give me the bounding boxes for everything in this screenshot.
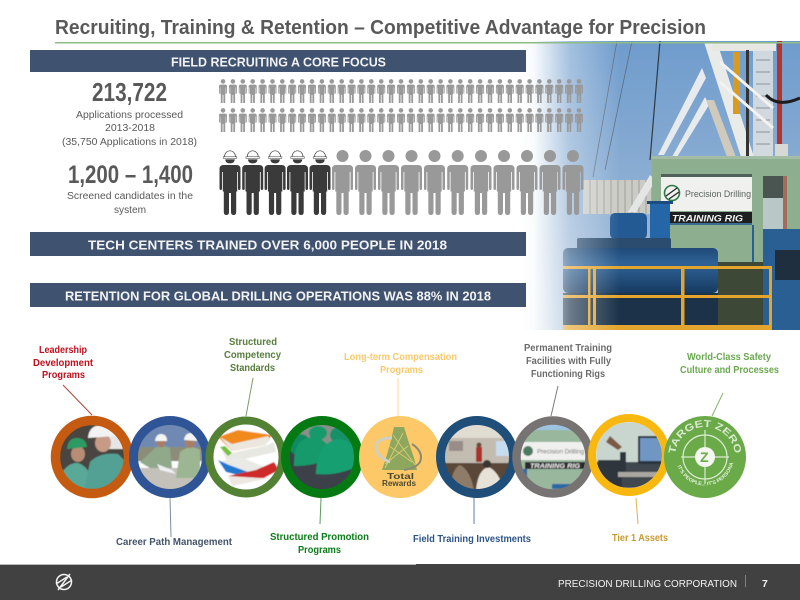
footer bar: 7 <box>762 578 768 590</box>
label: leadership development <box>33 345 94 381</box>
rig photo <box>520 41 800 330</box>
banner: retention <box>30 283 526 307</box>
label: structured competency: Standards <box>230 363 275 374</box>
leader line: safety <box>712 393 723 416</box>
label: structured competency: Competency <box>224 350 281 361</box>
circle: field training photo <box>440 420 514 494</box>
label: permanent training facilities: Permanent Training <box>524 343 612 354</box>
label: leadership development: Leadership <box>39 345 87 356</box>
banner: tech centers <box>30 232 526 256</box>
label: career path management: Career Path Management <box>116 537 233 548</box>
title: Recruiting, Training & Retention – Competitive Advantage for Precision <box>55 17 706 39</box>
leader line: competency <box>246 378 253 416</box>
banner: retention: RETENTION FOR GLOBAL DRILLING OPERATIONS WAS 88% IN 2018 <box>65 288 491 304</box>
footer bar: PRECISION DRILLING CORPORATION <box>558 578 737 590</box>
label: structured competency: Structured <box>229 337 277 348</box>
leader line: facilities <box>551 386 558 416</box>
label: long-term compensation: Programs <box>380 365 423 376</box>
label: leadership development: Development <box>33 358 94 369</box>
label: long-term compensation <box>344 352 457 376</box>
rig photo: TRAINING RIG <box>672 214 743 224</box>
label: structured promotion: Programs <box>298 545 341 556</box>
rig photo: Precision Drilling <box>685 189 751 200</box>
circle: target zero badge: TARGET ZERO <box>668 420 741 453</box>
circle: total rewards logo: Rewards <box>382 479 417 488</box>
stat: applications processed: (35,750 Applications in 2018) <box>62 137 197 148</box>
pictogram: small people rows <box>219 79 583 132</box>
stat: applications processed: 213,722 <box>92 77 167 107</box>
label: long-term compensation: Long-term Compensation <box>344 352 457 363</box>
stat: screened candidates: system <box>114 205 146 216</box>
leader line: promotion <box>320 498 321 524</box>
label: permanent training facilities <box>524 343 612 380</box>
circle: leadership photo <box>56 420 128 494</box>
label: structured promotion: Structured Promotion <box>270 532 369 543</box>
label: world-class safety <box>680 352 779 376</box>
circle: hard hats photo <box>286 420 361 494</box>
stat: applications processed: Applications processed <box>76 110 183 121</box>
leader line: field training <box>473 498 475 524</box>
circle: target zero badge: Z <box>700 449 709 465</box>
circle: tier 1 control cabin photo <box>592 418 666 492</box>
leader line: leadership <box>63 385 92 415</box>
circle: total rewards logo: Total <box>387 472 414 481</box>
circle: books photo <box>210 420 282 494</box>
label: permanent training facilities: Functioning Rigs <box>531 369 605 380</box>
label: permanent training facilities: Facilities with Fully <box>526 356 611 367</box>
stat: screened candidates: Screened candidates in the <box>67 191 193 202</box>
label: structured promotion <box>270 532 369 556</box>
pictogram: large people with hard hats <box>220 150 584 215</box>
label: structured competency <box>224 337 281 374</box>
banner: field recruiting <box>30 50 526 72</box>
leader line: compensation <box>397 378 399 416</box>
circle: training rig photo <box>516 420 590 494</box>
circle: training rig photo: TRAINING RIG <box>530 464 580 470</box>
stat: screened candidates: 1,200 – 1,400 <box>68 161 193 189</box>
stat: applications processed: 2013-2018 <box>105 123 155 134</box>
label: leadership development: Programs <box>42 370 85 381</box>
stat: screened candidates <box>67 161 193 216</box>
title underline <box>55 42 800 44</box>
circle: career path photo <box>134 420 206 494</box>
circle: training rig photo: Precision Drilling <box>537 450 584 456</box>
circle: total rewards logo <box>359 416 441 498</box>
circle: target zero badge <box>664 416 746 498</box>
label: world-class safety: Culture and Processes <box>680 365 779 376</box>
banner: tech centers: TECH CENTERS TRAINED OVER 6,000 PEOPLE IN 2018 <box>88 238 447 252</box>
icon: precision drilling logo <box>56 574 72 590</box>
label: field training investments: Field Training Investments <box>413 534 531 545</box>
circle: target zero badge: IT'S PEOPLE... IT'S PERSONAL <box>678 462 734 486</box>
stat: applications processed <box>62 77 197 148</box>
leader line: career path <box>170 498 171 537</box>
label: world-class safety: World-Class Safety <box>687 352 771 363</box>
banner: field recruiting: FIELD RECRUITING A CORE FOCUS <box>171 54 386 70</box>
footer bar <box>0 564 800 600</box>
label: tier 1 assets: Tier 1 Assets <box>612 533 668 544</box>
leader line: tier 1 <box>636 498 638 524</box>
